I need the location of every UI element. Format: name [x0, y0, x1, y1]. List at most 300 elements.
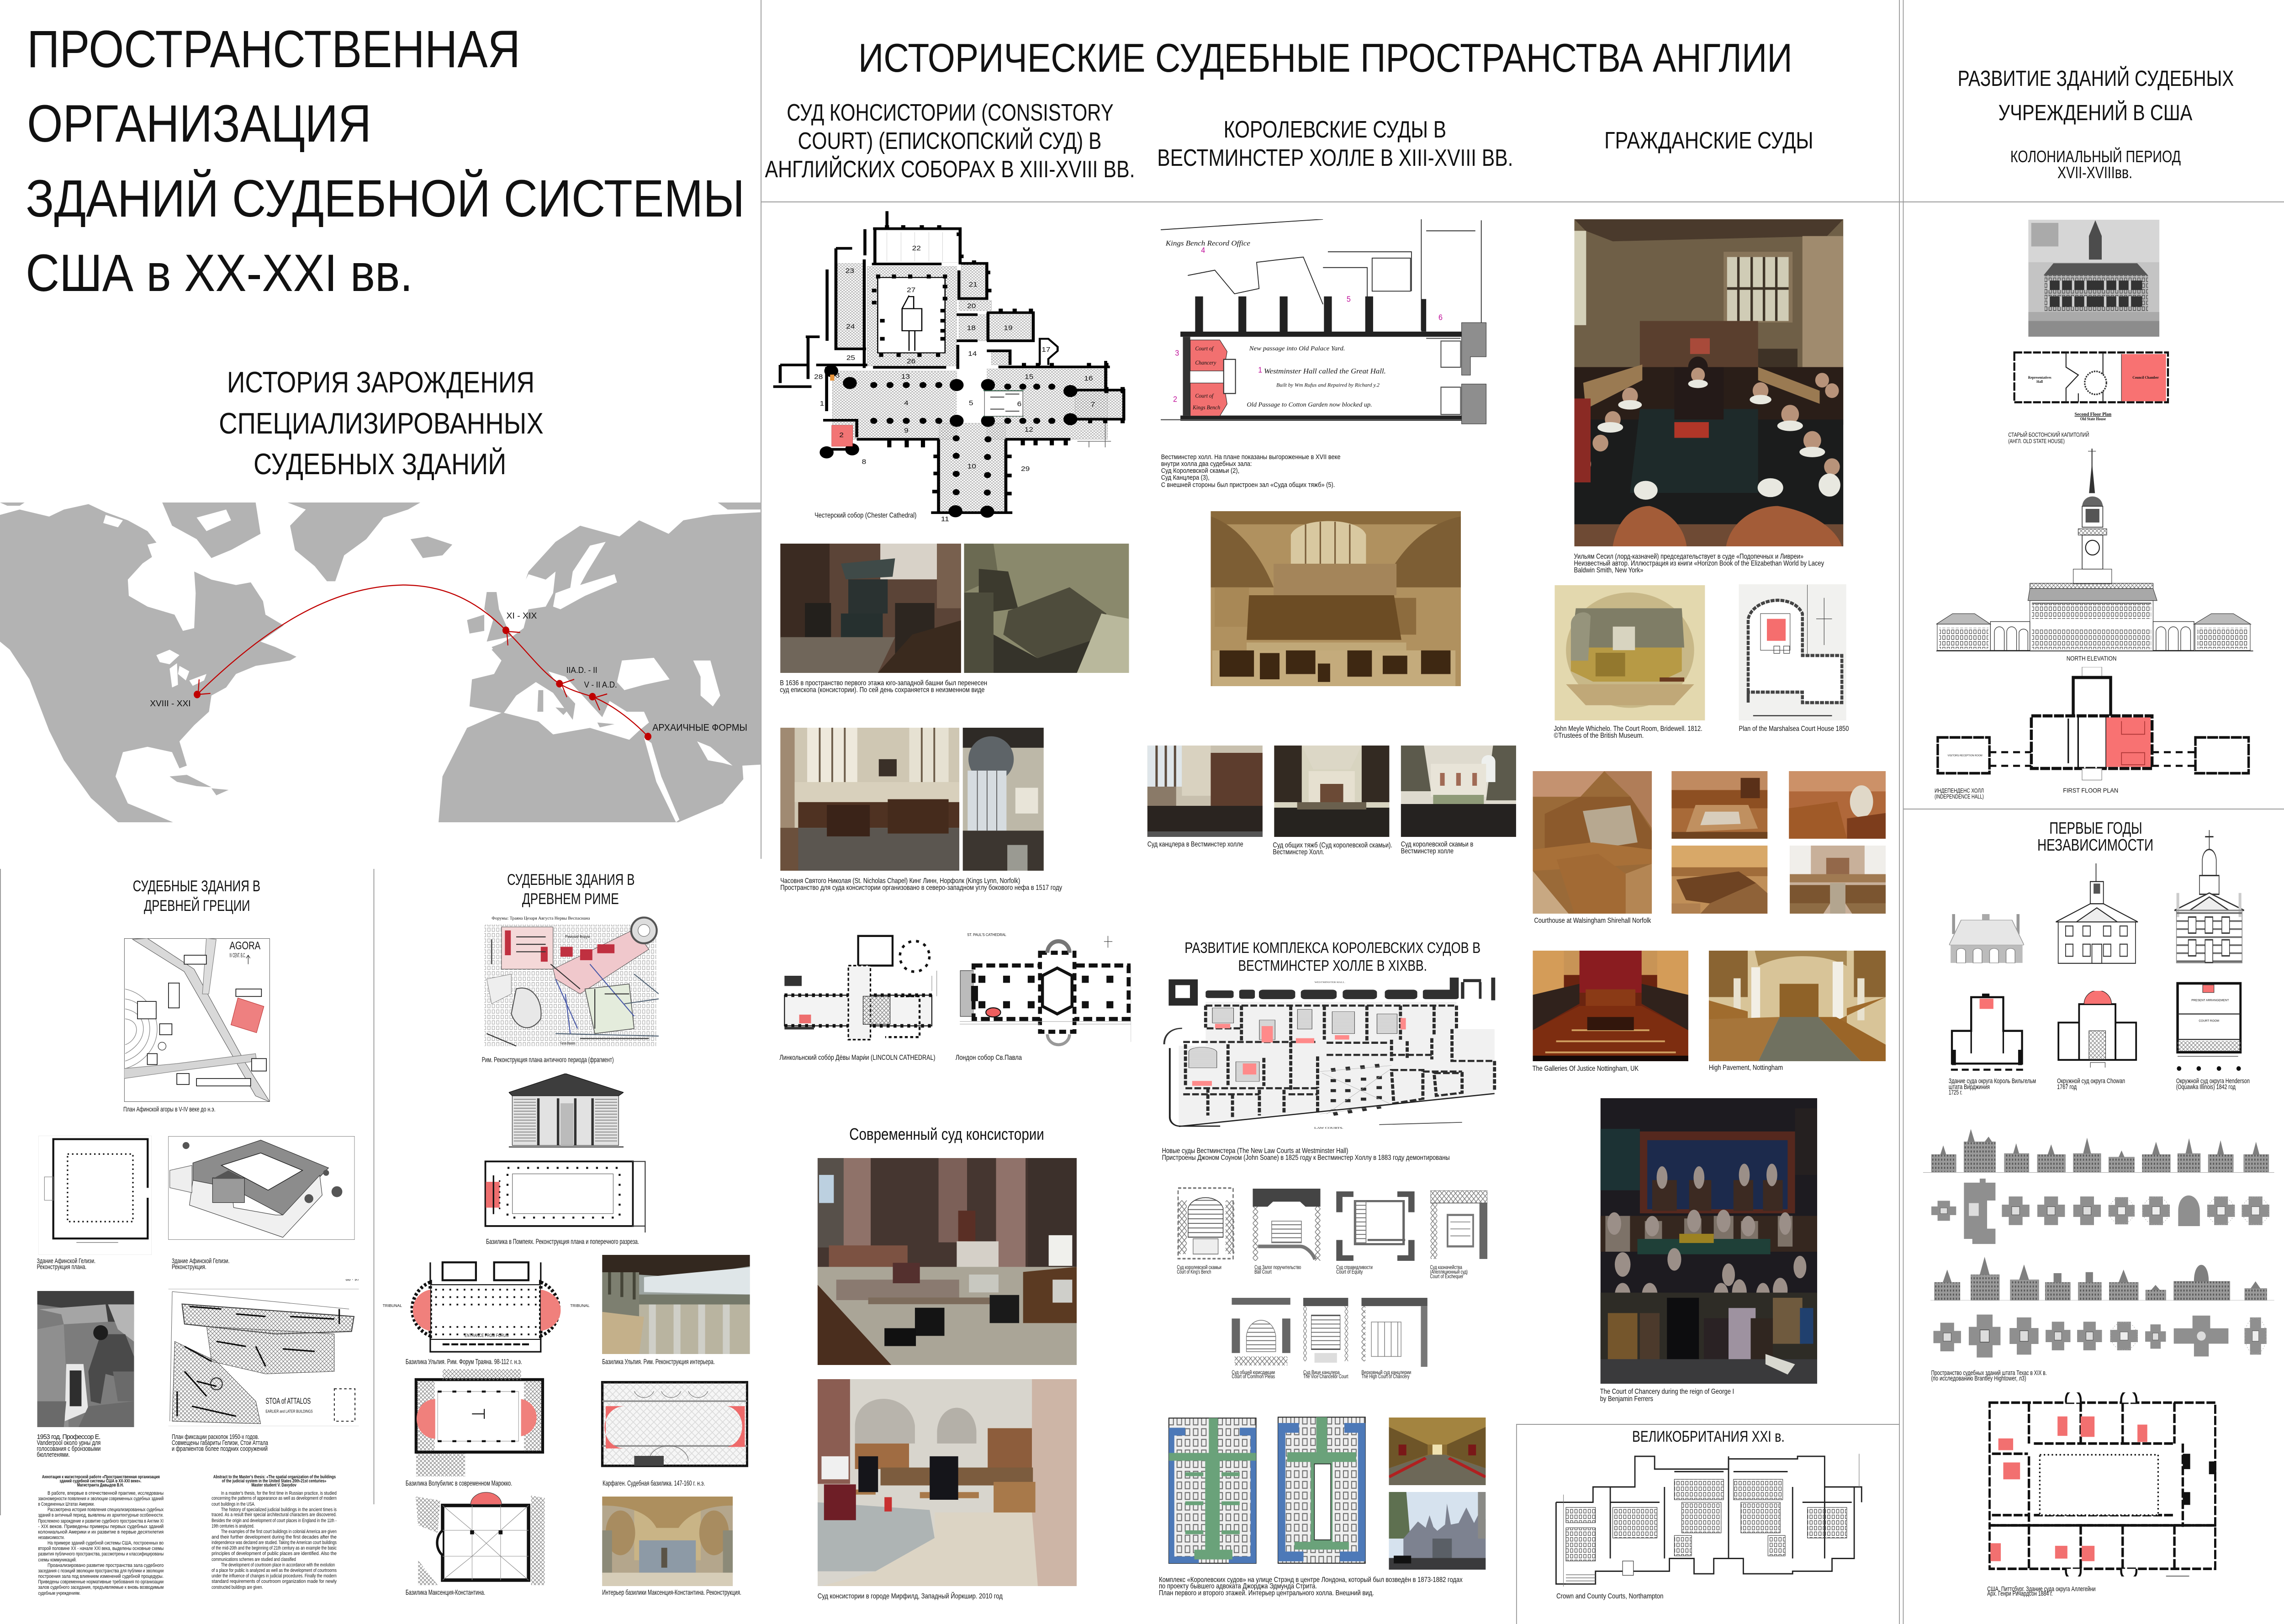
caption: Maxentius plan: Базилика Максенция-Константина.: [406, 1589, 485, 1597]
plan: Chester Cathedral: 1: [820, 400, 824, 407]
captions: small court plans row 2: The High Court of Chancery: [1361, 1374, 1410, 1380]
plan: Chester Cathedral: 18: [967, 324, 976, 332]
heading: history: СУДЕБНЫХ ЗДАНИЙ: [254, 447, 506, 481]
heading: Great Britain 21st century: ВЕЛИКОБРИТАНИЯ XXI в.: [1632, 1428, 1785, 1445]
caption: Bridewell: ©Trustees of the British Museum.: [1554, 732, 1644, 740]
captions: small court plans row 1: Court of Exchequer: [1430, 1274, 1464, 1280]
caption: Texas: [1931, 1369, 2047, 1382]
plan: Heliaia: [38, 1136, 152, 1255]
plan: Westminster Hall: 4: [1201, 246, 1205, 255]
caption: Old State House: (АНГЛ. OLD STATE HOUSE): [2008, 438, 2065, 444]
Texas plans row 1: [1931, 1179, 2269, 1244]
heading: consistory courts: АНГЛИЙСКИХ СОБОРАХ В XIII-XVIII ВВ.: [765, 156, 1135, 182]
heading: royal courts: КОРОЛЕВСКИЕ СУДЫ В: [1224, 116, 1446, 143]
plan: Chester Cathedral: 2: [839, 431, 844, 439]
plan: Westminster Hall: Chancery: [1195, 360, 1216, 366]
plan: Chester Cathedral: 10: [968, 463, 976, 470]
panel: ancient Rome: [383, 871, 750, 1597]
map labels: IIA.D. - II: [566, 665, 597, 675]
plan: Chester Cathedral: 19: [1004, 324, 1013, 332]
caption: agora: План Афинской агоры в V-IV веке до н.э.: [123, 1106, 216, 1113]
chart: Texas courthouses typology: [1923, 1129, 2274, 1358]
text block: Russian abstract: Приведены современные нормативные требования по организации: [38, 1579, 164, 1585]
plan: Chester Cathedral: 8: [862, 458, 866, 466]
caption: excavation: Vanderpool около урны для: [37, 1439, 100, 1447]
plan: Vice Chancellor Court: [1303, 1298, 1348, 1363]
heading: Rome: ДРЕВНЕМ РИМЕ: [522, 890, 619, 907]
heading: colonial period: [2010, 147, 2181, 182]
captions: small court plans row 2: Суд общей юрисдикции: [1232, 1370, 1275, 1375]
caption: Westminster plan: [1161, 454, 1341, 489]
plan: Chester Cathedral: 25: [846, 354, 855, 362]
plan: Chester Cathedral: 14: [968, 350, 977, 358]
photo: King's Lynn window: [963, 728, 1044, 871]
caption: Stoa plan: Совмещены габариты Гелиэи, Стои Аттала: [172, 1439, 269, 1447]
caption: Old State House: [2008, 431, 2089, 444]
photo: modern consistory court 1: [818, 1158, 1077, 1365]
text block: Russian abstract: развития публичного пространства, рассмотрены и классифицированы: [38, 1551, 164, 1557]
plan: Basilica Ulpia: TRIBUNAL: [570, 1303, 590, 1308]
Texas elevations row 1: [1923, 1129, 2274, 1173]
text block: Russian abstract: второй половине XX - начале XXI века, выделены основные схемы: [38, 1546, 164, 1551]
text block: Russian abstract: закономерности появления и эволюции современных судебных зданий: [38, 1496, 164, 1502]
plan: Royal Courts of Justice second floor: [1278, 1417, 1365, 1563]
plan: Old State House second floor: Representatives: [2028, 376, 2051, 380]
plan: Stoa of Attalos excavation: [168, 1277, 362, 1426]
map labels: АРХАИЧНЫЕ ФОРМЫ: [652, 723, 747, 733]
caption: Bridewell: [1554, 725, 1702, 740]
plan: Chester Cathedral: 5: [969, 399, 973, 407]
drawing: Chowan courthouse elevation: [2056, 863, 2138, 963]
caption: Westminster plan: С внешней стороны был пристроен зал «Суда общих тяжб» (5).: [1161, 481, 1335, 489]
heading: royal courts complex: ВЕСТМИНСТЕР ХОЛЛЕ В XIXВВ.: [1238, 957, 1427, 974]
plan: Chester Cathedral: 22: [912, 244, 921, 252]
text block: English abstract: communications schemes are studied and classified: [211, 1557, 296, 1562]
plan: Allegheny County Courthouse: [1989, 1391, 2216, 1579]
caption: William Cecil: Baldwin Smith, New York»: [1574, 566, 1643, 574]
caption: William Cecil: [1574, 553, 1824, 574]
panel: development of court buildings in USA: [1923, 66, 2274, 1597]
captions: small court plans row 2: Суд Вице канцлера: [1303, 1370, 1340, 1375]
photo: Royal Courts interior: [1389, 1418, 1486, 1485]
caption: Ulpia interior: Базилика Ульпия. Рим. Реконструкция интерьера.: [602, 1358, 715, 1366]
caption: Westminster plan: Суд Королевской скамьи (2),: [1161, 467, 1239, 475]
caption: Heliaia plan: [37, 1258, 95, 1271]
heading: colonial period: КОЛОНИАЛЬНЫЙ ПЕРИОД: [2010, 147, 2181, 166]
heading: consistory courts: COURT) (ЕПИСКОПСКИЙ СУД) В: [798, 127, 1101, 154]
caption: Old State House: СТАРЫЙ БОСТОНСКИЙ КАПИТОЛИЙ: [2008, 431, 2089, 438]
panel: civil courts: [1533, 127, 1886, 1600]
text block: English abstract: and their further development during the first decades after the: [211, 1534, 337, 1540]
heading: Greece: ДРЕВНЕЙ ГРЕЦИИ: [144, 897, 250, 914]
map labels: XI - XIX: [507, 611, 537, 620]
captions: three Westminster courts: Суд королевской скамьи в: [1401, 841, 1473, 848]
plan: Marshalsea Court House: [1739, 584, 1846, 720]
photo: Walsingham courtroom 3: [1789, 771, 1886, 839]
plan: Chester Cathedral: 27: [907, 286, 915, 294]
text block: English abstract: 19th centuries is analyzed.: [211, 1523, 254, 1529]
caption: Soane plan: Новые суды Вестминстера (The New Law Courts at Westminster Hall): [1162, 1147, 1348, 1155]
plan: Court of Exchequer: [1430, 1190, 1487, 1259]
photo: King's Bench, Westminster Hall: [1401, 746, 1516, 837]
captions: small court plans row 1: (Апелляционный суд): [1430, 1270, 1468, 1275]
title: США в XX-XXI вв.: [26, 243, 413, 302]
plan: Henderson courthouse: [2177, 984, 2241, 1071]
plan: Westminster Hall: Westminster Hall called the Great Hall.: [1264, 367, 1386, 376]
plan: Chester Cathedral: 6: [1017, 400, 1021, 408]
photo: King's Lynn chapel: [780, 728, 959, 871]
captions: small court plans row 1: Court of Equity: [1336, 1270, 1363, 1275]
caption: Independence Hall: ИНДЕПЕНДЕНС ХОЛЛ: [1935, 788, 1984, 794]
plan: Westminster Hall: 2: [1173, 395, 1177, 404]
plan: Westminster Hall: 5: [1347, 295, 1351, 303]
captions: three Westminster courts: Вестминстер холле: [1401, 847, 1454, 855]
captions: three Westminster courts: Суд общих тяжб (Суд королевской скамьи).: [1273, 841, 1392, 849]
route arc: [197, 585, 648, 736]
caption: Allegheny: Арх. Генри Ричардсон 1884 г.: [1987, 1590, 2053, 1597]
panel: ancient Greece: [37, 877, 362, 1459]
heading: Rome: СУДЕБНЫЕ ЗДАНИЯ В: [507, 871, 634, 888]
text block: English abstract: of the mid-20th and the beginning of 21th century as an example the basic: [211, 1545, 337, 1551]
text block: English abstract: In a master's thesis, for the first time in Russian practice, is studied: [221, 1491, 337, 1496]
plan: Chester Cathedral: 15: [1025, 373, 1033, 381]
captions: small court plans row 2: Верховный суд канцлерии: [1361, 1370, 1411, 1375]
plan: Pompeii basilica: [486, 1161, 645, 1233]
captions: early courthouses: (Oquawka Illinois) 1842 год: [2176, 1083, 2236, 1090]
panel: royal courts in Westminster Hall: [1147, 116, 1516, 1597]
text block: Russian abstract: - XIX веков. Приведены примеры первых судебных зданий: [38, 1524, 164, 1529]
plan title: Second Floor Plan: Old State House: [2080, 417, 2106, 421]
caption: Marshalsea: Plan of the Marshalsea Court House 1850: [1739, 725, 1849, 733]
title: ПРОСТРАНСТВЕННАЯ: [27, 20, 520, 79]
text block: Russian abstract: Прослежено зарождение и развитие судебного пространства в Англии XI: [38, 1518, 164, 1524]
captions: three Westminster courts: [1147, 841, 1473, 856]
caption: Heliaia plan: Здание Афинской Гелиэи.: [37, 1258, 95, 1265]
plan: Chester Cathedral: 21: [969, 281, 978, 288]
plan: Basilica of Maxentius: [416, 1492, 545, 1585]
heading: colonial period: XVII-XVIIIвв.: [2057, 164, 2132, 182]
heading: development in the USA: РАЗВИТИЕ ЗДАНИЙ СУДЕБНЫХ: [1958, 66, 2234, 90]
plan: Court of Equity: [1336, 1191, 1415, 1261]
captions: small court plans row 2: The Vice Chancellor Court: [1303, 1374, 1348, 1380]
plan: Westminster Hall: Court of: [1195, 345, 1214, 352]
plan: Soane Law Courts: LAW COURTS.: [1314, 1127, 1343, 1130]
map: Rome forum plan: Римский Форум: [566, 934, 590, 939]
text block: Russian abstract: построения зала под влиянием изменений судебной процедуры.: [38, 1574, 164, 1579]
caption: Galleries: The Galleries Of Justice Nottingham, UK: [1533, 1065, 1639, 1073]
photo: Walsingham courthouse main: [1533, 771, 1652, 914]
title: [26, 20, 745, 302]
photo: Galleries of Justice: [1533, 951, 1688, 1061]
plan: King William courthouse: [1951, 994, 2023, 1070]
photo: Royal Courts exterior: [1389, 1492, 1486, 1570]
plan: Chester Cathedral: 20: [967, 302, 976, 310]
plan: Westminster Hall: Court of: [1195, 392, 1214, 399]
plan: Westminster Hall: New passage into Old Palace Yard.: [1249, 345, 1345, 352]
text block: English abstract: The history of specialized judicial buildings in the ancient times is: [221, 1507, 337, 1513]
plan: Chester Cathedral: 16: [1084, 375, 1093, 382]
plan: Westminster Hall: Built by Wm Rufus and Repaired by Richard y.2: [1276, 382, 1380, 388]
text block: English abstract: Besides the origin and development of court places in England in the 11th -: [211, 1518, 337, 1523]
text block: Russian abstract: Рассмотрена история появления специализированных судебных: [48, 1507, 164, 1513]
heading: modern consistory court: Современный суд консистории: [849, 1125, 1044, 1143]
heading: history: ИСТОРИЯ ЗАРОЖДЕНИЯ: [227, 366, 534, 399]
caption: Lincoln: Линкольнский собо́р Дёвы Мари́и (LINCOLN CATHEDRAL): [779, 1054, 936, 1062]
text block: English abstract: Abstract to the Master's thesis: «The spatial organization of the buildings: [213, 1475, 336, 1480]
captions: small court plans row 1: [1177, 1265, 1468, 1280]
main heading: historic court spaces of England: ИСТОРИЧЕСКИЕ СУДЕБНЫЕ ПРОСТРАНСТВА АНГЛИИ: [858, 36, 1792, 81]
map: Rome forum plan: Форумы: Траяна Цезаря Августа Нервы Веспасиана: [492, 916, 590, 921]
text block: English abstract: of the judicial system in the United States 20th-21st centuries»: [222, 1479, 326, 1484]
photo: High Pavement: [1709, 951, 1886, 1061]
caption: Stoa plan: и фрагментов более поздних сооружений: [172, 1445, 268, 1453]
photo: Walsingham courtroom 2: [1671, 771, 1767, 839]
plan: Chowan courthouse: [2058, 990, 2136, 1069]
plan: Westminster Hall: 3: [1175, 349, 1179, 358]
plan: Stoa of Attalos excavation: STOA of ATTALOS: [265, 1396, 311, 1406]
caption: Chester photos: [780, 679, 987, 694]
text block: Russian abstract: в Соединенных Штатах Америки.: [38, 1502, 95, 1507]
plan: Soane Law Courts: WESTMINSTER HALL.: [1315, 981, 1345, 984]
plan: Westminster Hall: 6: [1438, 313, 1443, 322]
heading: royal courts complex: РАЗВИТИЕ КОМПЛЕКСА КОРОЛЕВСКИХ СУДОВ В: [1184, 939, 1480, 956]
Texas plans row 2: [1934, 1315, 2267, 1358]
drawing: Heliaia reconstruction: [168, 1136, 354, 1240]
Texas elevations row 2: [1930, 1257, 2274, 1300]
caption: William Cecil: Уильям Сесил (лорд-казначей) председательствует в суде «Подопечных и Ливреи»: [1574, 553, 1803, 561]
map labels: V - II A.D.: [584, 680, 617, 689]
heading: royal courts: [1157, 116, 1513, 171]
plan: Basilica Ulpia: TRIBUNAL: [383, 1303, 402, 1308]
caption: Stoa plan: [172, 1434, 269, 1453]
caption: Westminster plan: Суд Канцлера (3),: [1161, 474, 1210, 481]
text block: Russian abstract: заседания с позиций эволюции пространства для публики и эволюции: [38, 1568, 164, 1574]
label: first floor plan: FIRST FLOOR PLAN: [2063, 787, 2118, 794]
text block: Russian abstract: судебным учреждениям.: [38, 1591, 80, 1596]
caption: excavation: голосования с бронзовыми: [37, 1445, 100, 1453]
plan: Chester Cathedral: 3: [835, 372, 840, 379]
caption: Pompeii: Базилика в Помпеях. Реконструкция плана и поперечного разреза.: [486, 1238, 639, 1246]
caption: excavation: 1953 год. Профессор Е.: [37, 1434, 100, 1441]
plan: Carthage basilica: [603, 1382, 747, 1466]
captions: early courthouses: 1725 г.: [1949, 1089, 1962, 1096]
text block: English abstract: The development of courtroom place in accordance with the evolution: [221, 1562, 335, 1568]
captions: small court plans row 1: Court of King's Bench: [1177, 1270, 1211, 1275]
caption: Mirfield: Суд консистории в городе Мирфилд, Западный Йоркшир. 2010 год: [818, 1592, 1003, 1600]
caption: Royal Courts of Justice: по проекту бывшего адвоката Джорджа Эдмунда Стрита.: [1159, 1582, 1317, 1590]
caption: Basilica Ulpia plan: Базилика Ульпия. Рим. Форум Траяна. 98-112 г. н.э.: [406, 1358, 522, 1366]
caption: William Cecil: Неизвестный автор. Иллюстрация из книги «Horizon Book of the Elizabethan World by Lacey: [1574, 560, 1824, 567]
captions: three Westminster courts: Вестминстер Холл.: [1273, 848, 1324, 856]
caption: King's Lynn: [780, 877, 1063, 892]
caption: High Pavement: High Pavement, Nottingham: [1709, 1064, 1783, 1072]
title: ЗДАНИЙ СУДЕБНОЙ СИСТЕМЫ: [26, 169, 745, 228]
caption: Royal Courts of Justice: [1159, 1576, 1463, 1597]
caption: Soane plan: Пристроены Джоном Соуном (John Soane) в 1825 году к Вестминстер Холлу в 1883 году демонтированы: [1162, 1154, 1450, 1162]
text block: Russian abstract: зданий судебной системы США в XX-XXI веке».: [59, 1479, 142, 1484]
plan: Chester Cathedral: 9: [904, 427, 909, 434]
heading: Greece: [133, 877, 260, 914]
caption: King's Lynn: Часовня Святого Николая (St. Nicholas Chapel) Кинг Линн, Норфолк (Kings Lynn, Norfolk): [780, 877, 1020, 885]
plan: Independence Hall first floor: [1938, 667, 2249, 780]
plan: Court of Common Pleas: [1232, 1298, 1290, 1365]
caption: Maxentius interior: Интерьер базилики Максенция-Константина. Реконструкция.: [602, 1589, 741, 1597]
caption: Volubilis: Базилика Волубилис в современном Марокко.: [406, 1480, 512, 1487]
plan title: Second Floor Plan: Second Floor Plan: [2075, 412, 2111, 417]
plan: Henderson courthouse: COURT ROOM: [2199, 1019, 2219, 1022]
heading: royal courts complex: [1184, 939, 1480, 974]
plan: Stoa of Attalos excavation: EARLIER and LATER BUILDINGS: [265, 1409, 313, 1414]
caption: Westminster plan: Вестминстер холл. На плане показаны выгороженные в XVII веке: [1161, 454, 1341, 461]
caption: Independence Hall: [1935, 788, 1984, 800]
caption: Texas: Пространство судебных зданий штата Техас в XIX в.: [1931, 1369, 2047, 1376]
plan: Basilica Ulpia: ENTRANCE FROM FORUM: [465, 1333, 509, 1338]
plan: Stoa of Attalos excavation: 88 · 976: [346, 1277, 362, 1282]
plan: Chester Cathedral: 12: [1025, 426, 1033, 434]
painting: Court of Chancery: [1601, 1098, 1817, 1384]
captions: early courthouses: 1767 год: [2057, 1083, 2077, 1090]
plan: Westminster Hall: Kings Bench Record Office: [1165, 239, 1250, 248]
caption: Chester photos: В 1636 в пространство первого этажа юго-западной башни был перенесен: [780, 679, 987, 687]
caption: excavation: бюллетенями.: [37, 1451, 70, 1459]
caption: Soane plan: [1162, 1147, 1450, 1162]
photo: Basilica Ulpia interior: [602, 1255, 750, 1354]
plan: Old State House second floor: [2014, 353, 2168, 402]
text block: Russian abstract: колониальной Америки и их развитие в первые десятилетия: [38, 1529, 164, 1535]
caption: Court of Chancery: [1600, 1388, 1734, 1403]
world map with route: [0, 503, 761, 822]
caption: Allegheny: США. Питтсбург. Здание суда округа Аллегейни: [1987, 1585, 2095, 1592]
plan: Chester Cathedral: 29: [1021, 465, 1030, 473]
captions: early courthouses: [1949, 1077, 2250, 1096]
heading: royal courts: ВЕСТМИНСТЕР ХОЛЛЕ В XIII-XVIII ВВ.: [1157, 144, 1513, 171]
panel: title and world map: [0, 20, 761, 822]
captions: small court plans row 2: [1232, 1370, 1411, 1380]
plan: Royal Courts of Justice first floor: [1169, 1418, 1256, 1563]
caption: Chester photos: суд епископа (консистории). По сей день сохраняется в неизменном виде: [780, 686, 984, 694]
text block: English abstract: under the influence of changes in judicial procedures. Finally the modern: [211, 1573, 337, 1579]
plan: Soane Law Courts: [1164, 978, 1495, 1130]
heading: development in the USA: УЧРЕЖДЕНИЙ В США: [1998, 101, 2192, 125]
photo: Court of Chancery, Westminster Hall: [1147, 746, 1263, 837]
heading: development in the USA: [1958, 66, 2234, 125]
painting: Maxentius interior: [602, 1497, 733, 1586]
map: Rome forum plan: Forum Boarium: [560, 1041, 575, 1045]
text block: Russian abstract: зданий в античный период, выявлены их архитектурные особенности.: [38, 1513, 164, 1518]
plan: High Court of Chancery: [1361, 1298, 1428, 1367]
caption: Independence Hall: (INDEPENDENCE HALL): [1935, 793, 1984, 800]
text block: English abstract: court buildings in the USA.: [211, 1502, 255, 1507]
plan: Chester Cathedral: 7: [1091, 401, 1095, 408]
plan: King's Bench court: [1178, 1188, 1234, 1259]
text block: Russian abstract: Магистранта Давыдов В.Н.: [77, 1483, 124, 1488]
plan: Athenian agora: IV CENT. B.C.: [229, 952, 246, 958]
caption: Texas: (по исследованию Brantley Hightower, л3): [1931, 1375, 2026, 1382]
caption: Rome plan: Рим. Реконструкция плана античного периода (фрагмент): [482, 1056, 614, 1064]
heading: consistory courts: [765, 99, 1135, 182]
plan: Crown and County Courts: [1556, 1454, 1861, 1587]
captions: early courthouses: Окружной суд округа Chowan: [2057, 1077, 2125, 1084]
caption: Court of Chancery: by Benjamin Ferrers: [1600, 1395, 1653, 1403]
map labels: XVIII - XXI: [150, 698, 191, 708]
plan: Chester Cathedral: 17: [1042, 346, 1050, 354]
heading: consistory courts: СУД КОНСИСТОРИИ (CONSISTORY: [787, 99, 1114, 126]
captions: small court plans row 1: Суд справедливости: [1336, 1265, 1373, 1270]
text block: English abstract: principles of development of public places are identified. Also the: [211, 1551, 337, 1556]
caption: Westminster plan: внутри холла два судебных зала:: [1161, 460, 1252, 468]
caption: excavation: [37, 1434, 100, 1459]
label: north elevation: NORTH ELEVATION: [2067, 655, 2116, 662]
photo: modern consistory court 2: [818, 1379, 1077, 1586]
heading: first years of independence: ПЕРВЫЕ ГОДЫ: [2049, 819, 2142, 837]
photo: Chester consistory furniture: [964, 544, 1129, 673]
heading: first years of independence: [2037, 819, 2153, 854]
caption: Heliaia plan: Реконструкция плана.: [37, 1264, 86, 1271]
caption: King's Lynn: Пространство для суда консистории организовано в северо-западном углу бокового нефа в 1517 году: [780, 884, 1063, 892]
text block: Russian abstract: схемы коммуникаций.: [38, 1557, 77, 1563]
plan: Chester Cathedral: 23: [846, 267, 854, 275]
engraving: Old State House: [2028, 220, 2159, 337]
photo: Court of Common Pleas, Westminster Hall: [1274, 746, 1389, 837]
drawing: Pompeii basilica section: [509, 1074, 624, 1147]
plan: Independence Hall first floor: VISITORS RECEPTION ROOM: [1948, 755, 1983, 757]
caption: Court of Chancery: The Court of Chancery during the reign of George I: [1600, 1388, 1734, 1396]
caption: Heliaia reconstruction: [172, 1258, 230, 1271]
heading: history: СПЕЦИАЛИЗИРОВАННЫХ: [219, 407, 544, 440]
text block: Russian abstract: На примере зданий судебной системы США, построенных во: [48, 1540, 164, 1546]
heading: Greece: СУДЕБНЫЕ ЗДАНИЯ В: [133, 877, 260, 894]
plan: Athenian agora: AGORA: [229, 940, 260, 952]
text block: Russian abstract: Проанализировано развитие пространства зала судебного: [48, 1563, 164, 1568]
captions: small court plans row 1: Суд королевской скамьи: [1177, 1265, 1221, 1270]
text block: Russian abstract: В работе, впервые в отечественной практике, исследованы: [48, 1491, 164, 1496]
photo: Walsingham benches 1: [1671, 846, 1767, 914]
map labels: [150, 611, 747, 733]
plan: Old State House second floor: Hall: [2036, 380, 2043, 384]
plan: Westminster Hall: Kings Bench: [1192, 404, 1220, 411]
caption: Bridewell: John Meyle Whichelo. The Court Room, Bridewell. 1812.: [1554, 725, 1702, 733]
text block: Russian abstract: залов судебного заседания, предъявляемые к вновь возводимым: [38, 1585, 164, 1590]
text block: English abstract: Master student V. Davydov: [251, 1483, 296, 1488]
caption: Royal Courts of Justice: Комплекс «Королевских судов» на улице Стрэнд в центре Лондона, который был возведён в 1873-1882 годах: [1159, 1576, 1463, 1584]
captions: early courthouses: Окружной суд округа Henderson: [2176, 1077, 2250, 1084]
caption: Stoa plan: План фиксации раскопок 1950-х годов.: [172, 1434, 259, 1441]
text block: Russian abstract: Аннотация к магистерской работе «Пространственная организация: [42, 1475, 160, 1480]
plan: Athenian agora: [124, 938, 270, 1102]
plan: Bail court: [1253, 1189, 1320, 1261]
map: Rome forum plan: [482, 915, 659, 1053]
plan: Westminster Hall: Old Passage to Cotton Garden now blocked up.: [1247, 401, 1372, 408]
plan: Basilica Ulpia: [383, 1262, 590, 1352]
heading: history: [219, 366, 544, 481]
plan: Old State House second floor: Council Chamber: [2132, 376, 2159, 380]
plan: Chester Cathedral: [773, 211, 1124, 523]
text block: Russian abstract: независимости.: [38, 1535, 65, 1540]
caption: St Paul: Лондон собор Св.Павла: [956, 1054, 1022, 1062]
text block: English abstract: constructed buildings are given.: [211, 1585, 263, 1590]
heading: Rome: [507, 871, 634, 907]
plan: Chester Cathedral: 24: [846, 323, 855, 330]
route points: [194, 627, 651, 741]
caption: Walsingham: Courthouse at Walsingham Shirehall Norfolk: [1534, 917, 1651, 925]
title: ОРГАНИЗАЦИЯ: [27, 94, 371, 153]
captions: small court plans row 1: Суд казначейства: [1430, 1265, 1462, 1270]
painting: William Cecil presiding: [1574, 219, 1843, 546]
plan: St Paul's Cathedral: [960, 933, 1131, 1045]
plan: Chester Cathedral: 13: [901, 373, 910, 380]
text block: English abstract: traced. As a result their special architectural characters are discovered.: [211, 1512, 337, 1518]
painting: Bridewell court room: [1554, 585, 1705, 720]
